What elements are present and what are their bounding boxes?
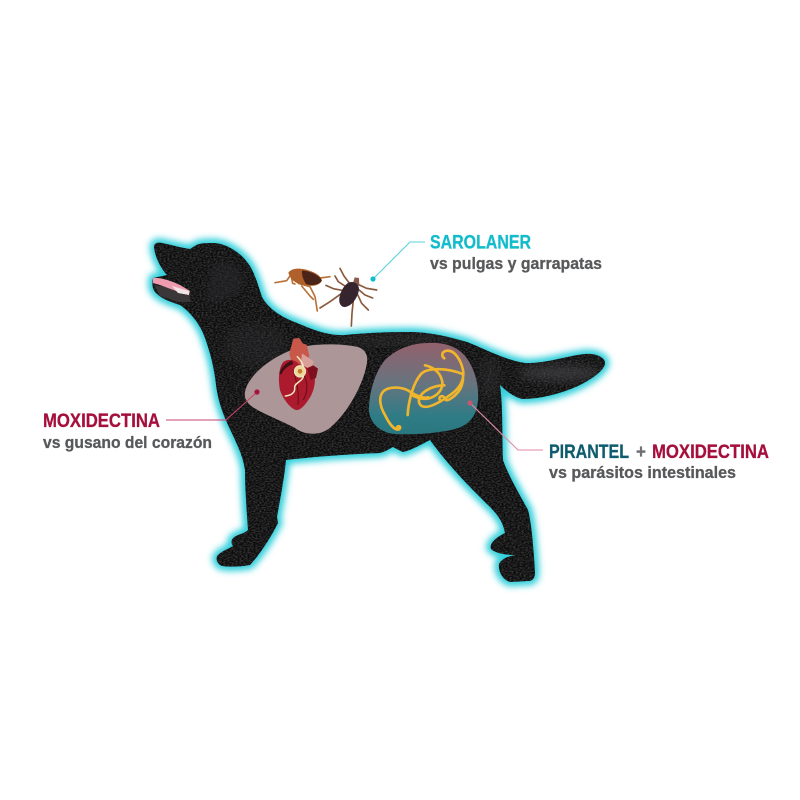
text block: pirantel and moxidectina: vs parásitos intestinales — [549, 463, 736, 482]
text block: pirantel and moxidectina: PIRANTEL — [549, 441, 629, 463]
text block: pirantel and moxidectina — [549, 441, 769, 482]
text block: pirantel and moxidectina: + — [636, 441, 646, 463]
panel: intestine area — [369, 343, 478, 434]
icon: intestinal worms — [380, 351, 463, 429]
callout: pirantel connector — [467, 400, 543, 450]
icon: flea — [275, 269, 330, 311]
callout: moxidectina connector — [166, 389, 260, 420]
icon: tick — [320, 268, 377, 326]
text block: sarolaner: vs pulgas y garrapatas — [430, 254, 602, 273]
icon: heart — [279, 338, 318, 410]
callout: sarolaner connector — [370, 242, 425, 282]
text block: sarolaner — [430, 232, 602, 273]
text block: moxidectina: vs gusano del corazón — [43, 433, 212, 452]
text block: moxidectina: MOXIDECTINA — [43, 410, 160, 432]
panel: heart area — [245, 344, 367, 434]
text block: pirantel and moxidectina: MOXIDECTINA — [652, 441, 769, 463]
text block: sarolaner: SAROLANER — [430, 232, 531, 254]
dog mouth and tongue — [153, 278, 191, 302]
infographic canvas — [42, 233, 769, 592]
dog silhouette — [152, 243, 605, 582]
text block: moxidectina — [43, 410, 212, 452]
dog glow — [152, 243, 605, 582]
